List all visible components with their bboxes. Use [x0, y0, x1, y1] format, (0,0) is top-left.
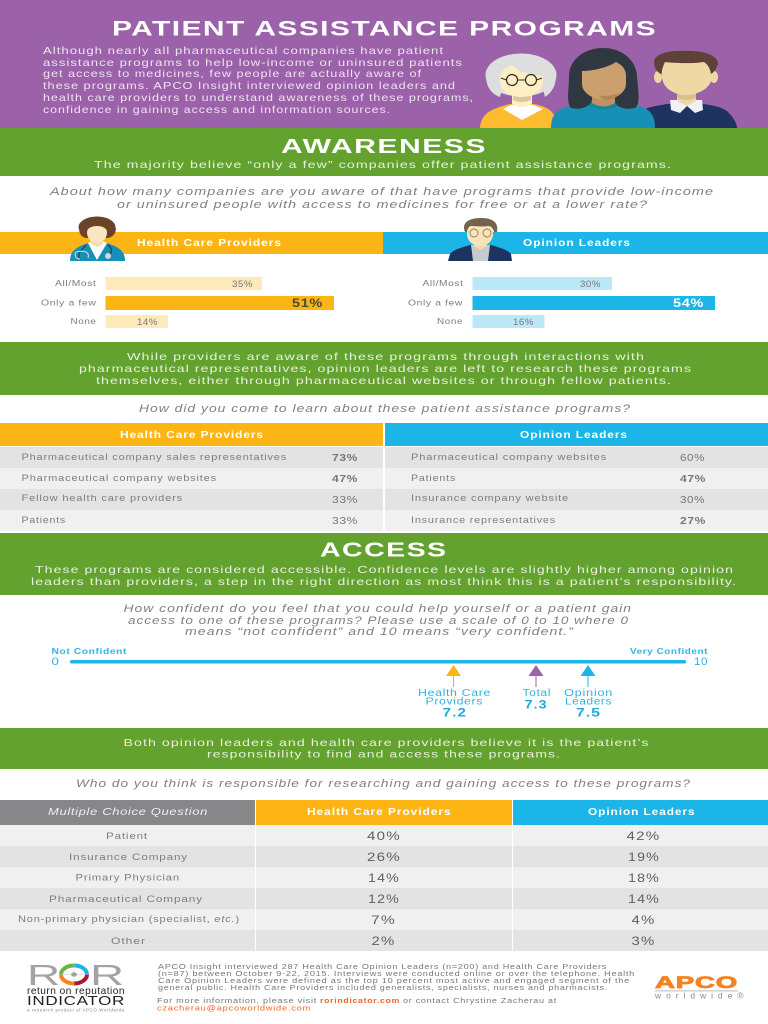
table: responsibility: 26% — [367, 850, 401, 864]
arrow: total score: Total — [522, 688, 551, 699]
arrow: providers score: Health Care — [418, 688, 491, 699]
table: opinion leaders information sources: 27% — [680, 516, 706, 527]
arrow: opinion leaders score — [564, 665, 613, 720]
table: responsibility: Multiple Choice Question — [48, 807, 208, 818]
bar chart: opinion leaders awareness: All/Most — [422, 278, 464, 288]
table: providers information sources: 73% — [332, 453, 358, 464]
access subtitle: leaders than providers, a step in the right direction as most think this is a patient’s responsibility. — [31, 576, 737, 588]
table: responsibility: Non-primary physician (specialist, etc. ) — [18, 914, 240, 925]
icon: woman with dark hair — [551, 48, 655, 128]
table: providers information sources: Health Care Providers — [120, 430, 264, 441]
question: how many companies: or uninsured people with access to medicines for free or at a lower rate? — [117, 199, 648, 211]
arrow: providers score: Providers — [426, 696, 483, 708]
table: responsibility: 42% — [626, 829, 660, 843]
table: opinion leaders information sources: 30% — [680, 495, 705, 506]
heading: awareness: AWARENESS — [281, 136, 487, 158]
question: who is responsible: Who do you think is responsible for researching and gaining access to these programs? — [76, 778, 691, 790]
logo: ROR indicator: a research product of APCO Worldwide — [27, 1008, 125, 1012]
arrow: providers score: 7.2 — [442, 706, 467, 720]
bar chart: opinion leaders awareness — [408, 277, 715, 328]
arrow: opinion leaders score: Opinion — [564, 688, 613, 699]
bar chart: opinion leaders awareness: Only a few — [408, 298, 463, 308]
intro text: Although nearly all pharmaceutical companies have patient — [43, 45, 444, 57]
question: how confident: access to one of these programs? Please use a scale of 0 to 10 where 0 — [128, 615, 629, 627]
table: providers information sources: 47% — [332, 474, 358, 485]
footer: methodology text: or contact Chrystine Zacherau at — [403, 996, 557, 1005]
bar chart: health care providers awareness: 14% — [137, 317, 158, 327]
bar chart: health care providers awareness: 51% — [292, 296, 323, 310]
panel: responsibility text: responsibility to find and access these programs. — [207, 748, 561, 760]
question: how many companies: About how many companies are you aware of that have programs that provide low-income — [49, 186, 714, 198]
table: responsibility: 18% — [628, 871, 660, 885]
logo: ROR indicator: R — [90, 960, 125, 992]
panel: providers versus leaders text: pharmaceutical representatives, opinion leaders are left to research these programs — [79, 363, 692, 375]
logo: ROR indicator: return on reputation — [27, 985, 125, 997]
bar chart: health care providers awareness — [41, 277, 334, 328]
arrow: opinion leaders score: 7.5 — [576, 706, 601, 720]
bar chart: opinion leaders awareness: 16% — [513, 317, 534, 327]
footer: methodology text: general public. Health Care Providers included generalists, specialists, nurses and pharmacists. — [158, 983, 608, 992]
access subtitle — [31, 564, 737, 588]
table: opinion leaders information sources: Insurance representatives — [411, 515, 556, 526]
chart: confidence scale — [52, 646, 708, 720]
table: opinion leaders information sources: 47% — [680, 474, 706, 485]
table: opinion leaders information sources: 60% — [680, 453, 705, 464]
panel: providers versus leaders text: While providers are aware of these programs through interactions with — [127, 351, 645, 363]
table: providers information sources: Pharmaceutical company sales representatives — [22, 452, 287, 463]
table: responsibility: 2% — [372, 934, 396, 948]
panel: providers versus leaders text — [0, 342, 768, 395]
access subtitle: These programs are considered accessible. Confidence levels are slightly higher among opinion — [35, 564, 734, 576]
panel: responsibility text — [0, 728, 768, 769]
table: responsibility: 7% — [371, 913, 396, 927]
chart: confidence scale: Very Confident — [630, 646, 708, 656]
intro text: confidence in gaining access and information sources. — [43, 104, 391, 116]
icon: man with collar — [640, 51, 737, 128]
panel: providers versus leaders text: themselves, either through pharmaceutical websites or through fellow patients. — [96, 375, 672, 387]
footer: methodology text — [157, 962, 635, 1012]
table: responsibility: Primary Physician — [76, 872, 180, 884]
bar chart: health care providers awareness: None — [70, 316, 96, 326]
bar chart: opinion leaders awareness: 30% — [580, 279, 601, 289]
band: opinion leaders: Opinion Leaders — [523, 238, 631, 249]
logo: APCO worldwide — [654, 973, 744, 1000]
table: responsibility: Opinion Leaders — [588, 807, 696, 818]
table: responsibility: Patient — [106, 831, 148, 842]
question: how did you learn: How did you come to learn about these patient assistance programs? — [139, 403, 631, 415]
bar chart: health care providers awareness: All/Most — [55, 278, 97, 288]
question: how confident — [124, 603, 632, 638]
table: opinion leaders information sources: Opinion Leaders — [520, 430, 628, 441]
chart: confidence scale: Not Confident — [52, 646, 127, 656]
table: opinion leaders information sources: Patients — [411, 473, 456, 484]
icon: doctor — [70, 216, 125, 261]
arrow: providers score — [418, 665, 491, 720]
table: opinion leaders information sources — [385, 423, 768, 531]
table: providers information sources: 33% — [332, 495, 358, 506]
footer: methodology text: Care Opinion Leaders were defined as the top 10 percent most active and engaged segment of the — [158, 976, 630, 985]
question: how confident: means “not confident” and 10 means “very confident.” — [185, 626, 575, 638]
table: responsibility: Other — [111, 936, 146, 947]
intro text: get access to medicines, few people are actually aware of — [43, 68, 422, 80]
question: how many companies — [49, 186, 714, 211]
table: responsibility: 19% — [628, 850, 660, 864]
logo: ROR indicator: INDICATOR — [27, 993, 125, 1008]
logo: APCO worldwide: worldwide® — [654, 990, 744, 1000]
table: responsibility: 14% — [628, 892, 660, 906]
logo: APCO worldwide: APCO — [655, 973, 738, 992]
table: responsibility: 4% — [632, 913, 656, 927]
title: PATIENT ASSISTANCE PROGRAMS — [112, 18, 657, 40]
arrow: total score — [522, 665, 551, 712]
table: providers information sources: Pharmaceutical company websites — [22, 473, 217, 484]
logo: ROR indicator: R — [27, 960, 61, 992]
table: responsibility: 3% — [632, 934, 656, 948]
footer: methodology text: APCO Insight interviewed 287 Health Care Opinion Leaders (n=200) and Health Care Providers — [158, 962, 607, 971]
icon: man in suit — [448, 218, 512, 261]
icon: older woman with glasses — [480, 54, 558, 128]
band: opinion leaders — [383, 232, 768, 254]
table: responsibility: 12% — [368, 892, 400, 906]
bar chart: health care providers awareness: 35% — [232, 279, 253, 289]
footer: methodology text: For more information, please visit — [157, 996, 317, 1005]
table: responsibility: Insurance Company — [69, 852, 188, 863]
bar chart: opinion leaders awareness: 54% — [673, 296, 704, 310]
table: providers information sources — [0, 423, 383, 531]
band: health care providers: Health Care Providers — [137, 238, 282, 249]
panel: awareness banner — [0, 128, 768, 176]
table: providers information sources: 33% — [332, 516, 358, 527]
bar chart: health care providers awareness: Only a few — [41, 298, 97, 308]
bar chart: opinion leaders awareness: None — [437, 316, 463, 326]
question: how confident: How confident do you feel that you could help yourself or a patient gain — [124, 603, 632, 615]
chart: confidence scale: 0 — [52, 656, 60, 668]
panel: responsibility text: Both opinion leaders and health care providers believe it is the patient’s — [124, 737, 650, 749]
chart: confidence scale: 10 — [694, 656, 708, 668]
heading: access: ACCESS — [320, 540, 448, 562]
logo: ROR indicator — [27, 960, 125, 1012]
footer: methodology text: (n=87) between October 9-22, 2015. Interviews were conducted online or over the telephone. Health — [158, 969, 635, 978]
table: responsibility: Health Care Providers — [307, 807, 452, 818]
table: providers information sources: Fellow health care providers — [22, 493, 183, 504]
table: opinion leaders information sources: Pharmaceutical company websites — [411, 452, 607, 463]
band: health care providers — [0, 232, 383, 254]
intro text: health care providers to understand awareness of these programs, — [43, 92, 474, 104]
intro text: assistance programs to help low-income or uninsured patients — [43, 57, 463, 69]
intro text: these programs. APCO Insight interviewed opinion leaders and — [43, 80, 456, 92]
arrow: opinion leaders score: Leaders — [565, 696, 612, 708]
table: responsibility: 14% — [368, 871, 400, 885]
table: responsibility: 40% — [367, 829, 401, 843]
footer: methodology text: czacherau@apcoworldwide.com — [157, 1004, 311, 1012]
table: responsibility — [0, 800, 768, 951]
intro text — [43, 45, 474, 116]
panel: access banner — [0, 533, 768, 595]
arrow: total score: 7.3 — [524, 698, 548, 712]
table: providers information sources: Patients — [22, 515, 66, 526]
awareness subtitle: The majority believe “only a few” companies offer patient assistance programs. — [94, 159, 672, 171]
panel: header — [0, 0, 768, 128]
footer: methodology text: rorindicator.com — [320, 996, 400, 1005]
table: opinion leaders information sources: Insurance company website — [411, 493, 569, 504]
table: responsibility: Pharmaceutical Company — [49, 894, 203, 905]
